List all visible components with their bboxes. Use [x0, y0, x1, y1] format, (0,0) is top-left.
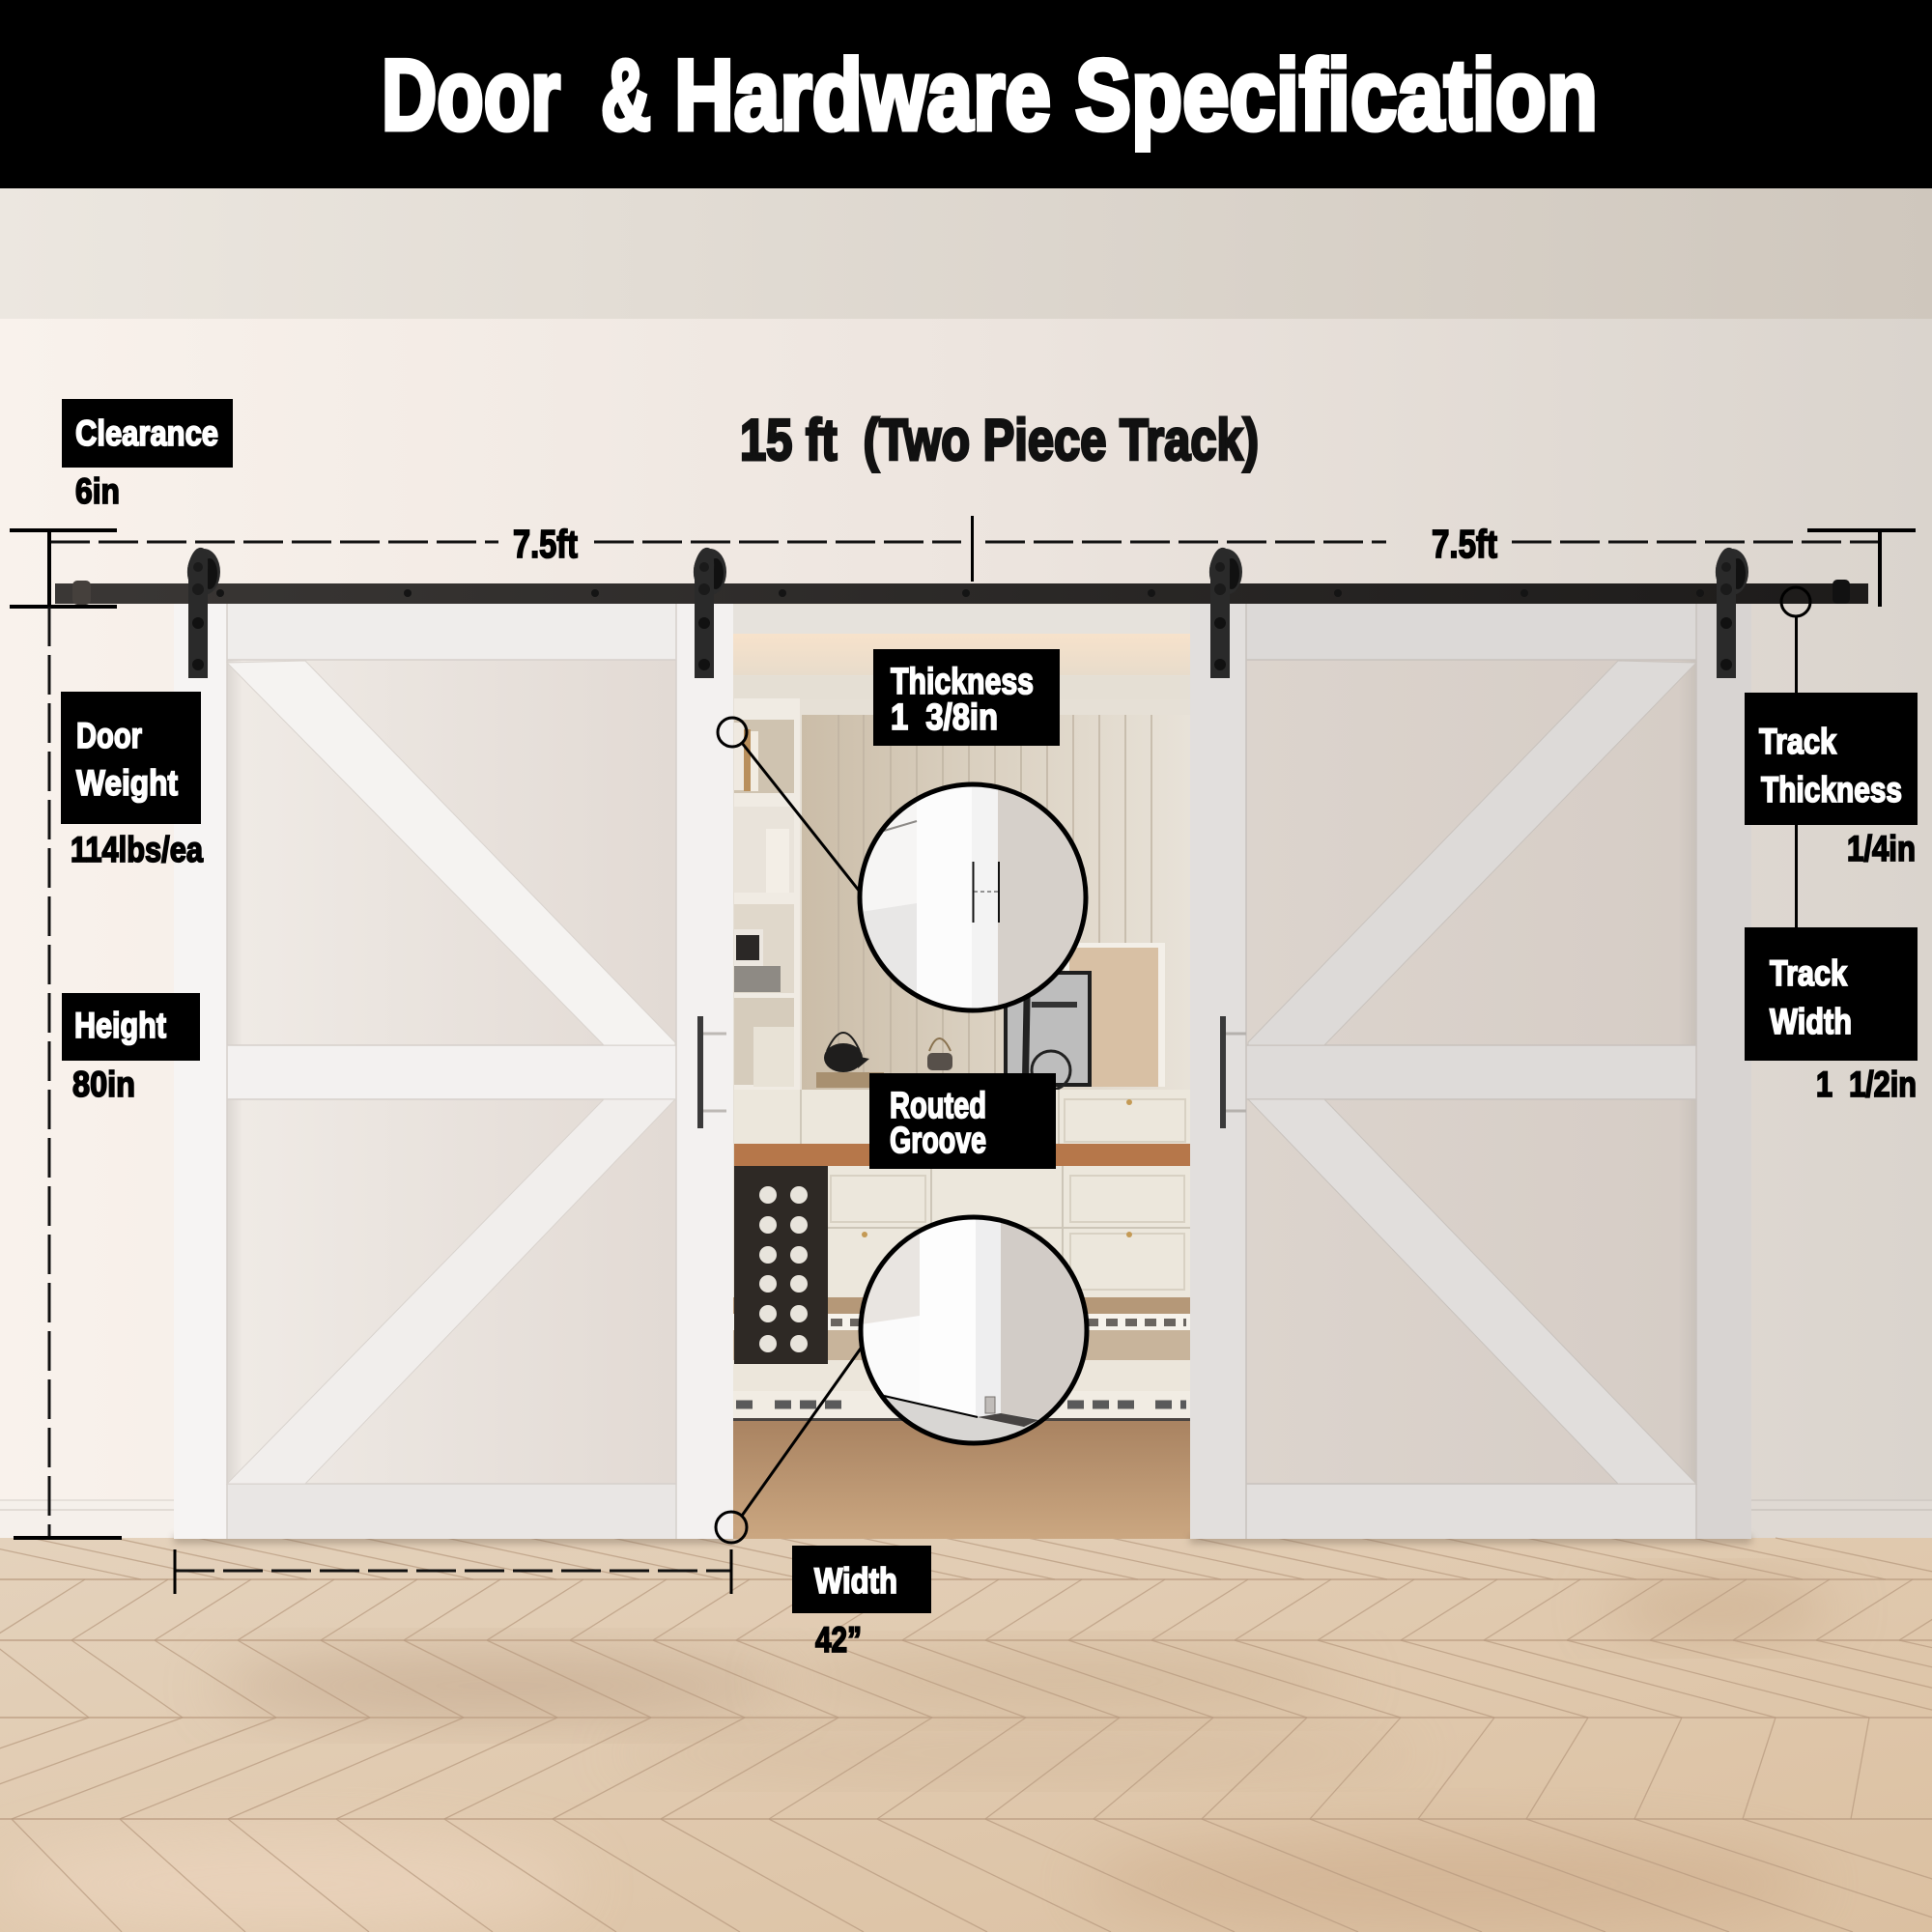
leader: track ring to track labels	[1781, 587, 1810, 930]
upper panel	[227, 660, 676, 1045]
callout: track width	[1745, 927, 1918, 1104]
callout: clearance: 6in	[75, 471, 120, 511]
callout: door weight: 114lbs/ea	[71, 830, 203, 869]
centre tick	[971, 516, 974, 582]
callout: door weight: Door	[76, 716, 142, 755]
callout: thickness: Thickness	[891, 662, 1034, 702]
track rail	[55, 583, 1868, 604]
black kettle	[816, 1033, 884, 1088]
title	[382, 40, 1598, 152]
left barn door	[174, 604, 733, 1539]
soffit	[733, 605, 1190, 634]
title: Specification	[1075, 40, 1598, 152]
upper panel	[1246, 660, 1696, 1045]
hanger 4	[1716, 548, 1748, 678]
callout: width: 42”	[815, 1620, 862, 1660]
patterned rug	[733, 1391, 1190, 1421]
title: Hardware	[674, 40, 1051, 152]
lower diagonal brace	[227, 1099, 675, 1484]
callout: width	[792, 1546, 931, 1660]
door handle	[1220, 1016, 1246, 1128]
callout: height: 80in	[72, 1065, 135, 1104]
crown moulding	[733, 676, 1190, 699]
wooden counter	[734, 1144, 1190, 1166]
baseboard left	[0, 1499, 174, 1538]
callout: door weight	[61, 692, 203, 869]
upper cabinets	[734, 1090, 1190, 1145]
callout: routed groove: Routed	[890, 1086, 986, 1126]
right end stop	[1833, 580, 1850, 604]
label: right section length: 7.5ft	[1432, 522, 1497, 566]
door frame	[1190, 604, 1751, 1539]
callout: thickness	[873, 649, 1060, 746]
callout: door weight: Weight	[76, 763, 178, 803]
lower cabinets	[828, 1166, 1190, 1297]
stiles and rails	[1190, 604, 1751, 1539]
right barn door	[1190, 604, 1751, 1539]
door handle	[697, 1016, 726, 1128]
clearance bracket right	[1807, 530, 1916, 607]
perforated black desk panel	[734, 1166, 828, 1364]
stiles and rails	[174, 604, 733, 1539]
callout: clearance: Clearance	[75, 413, 218, 453]
framed artwork	[1004, 943, 1165, 1090]
bookshelf	[734, 698, 800, 1090]
circle outline	[860, 784, 1086, 1010]
lower panel	[1246, 1099, 1696, 1484]
callout: track thickness: Thickness	[1761, 770, 1902, 810]
wall	[0, 319, 1932, 1538]
leader line	[742, 1346, 863, 1516]
clearance bracket left	[10, 530, 117, 607]
door height dimension line	[14, 607, 122, 1540]
title: &	[601, 40, 651, 152]
source ring	[718, 718, 747, 747]
upper diagonal brace	[1248, 661, 1696, 1045]
circle outline	[861, 1217, 1087, 1443]
magnified detail	[864, 1219, 1084, 1441]
door frame	[174, 604, 733, 1539]
callout: thickness: 1 3/8in	[891, 697, 998, 738]
callout: track thickness: Track	[1759, 722, 1836, 761]
lower panel	[227, 1099, 676, 1484]
horizontal track dimension lines	[50, 516, 1880, 582]
interior room seen through the opening	[733, 604, 1190, 1539]
callout: track thickness	[1745, 693, 1918, 868]
ceiling band	[0, 188, 1932, 319]
header bar	[0, 0, 1932, 188]
label: left section length: 7.5ft	[513, 522, 578, 566]
warm ceiling light	[733, 634, 1190, 675]
wood floor	[733, 1421, 1190, 1539]
callout: width: Width	[814, 1561, 897, 1601]
upper diagonal brace	[227, 661, 675, 1045]
floor beyond the door	[733, 1297, 1190, 1391]
parquet floor	[0, 1538, 1932, 1932]
callout: track width: Width	[1770, 1002, 1852, 1041]
track bolts	[216, 589, 1704, 597]
sliding track and hangers	[55, 548, 1868, 678]
panelled wall	[802, 715, 1190, 1090]
title: Door	[382, 40, 560, 152]
callout: clearance	[62, 399, 233, 511]
callout: track width: Track	[1770, 953, 1847, 993]
callout: routed groove	[869, 1073, 1056, 1169]
hanger 2	[694, 548, 726, 678]
callout: height: Height	[74, 1006, 166, 1045]
callout: track thickness: 1/4in	[1847, 829, 1916, 868]
hanger 3	[1209, 548, 1242, 678]
callout: routed groove: Groove	[890, 1121, 986, 1161]
callout: height	[62, 993, 200, 1104]
magnified detail	[862, 786, 1084, 1009]
thickness ticks	[974, 862, 999, 923]
floor shadow under doors	[174, 1536, 1751, 1543]
back wall	[733, 604, 1190, 1420]
source ring	[716, 1512, 747, 1543]
small kettle	[927, 1038, 952, 1070]
baseboard right	[1751, 1499, 1932, 1538]
leader line	[742, 743, 860, 892]
magnifier: door thickness	[718, 718, 1096, 1019]
magnifier: routed groove	[716, 1212, 1097, 1543]
hanger 1	[187, 548, 220, 678]
total track length heading: 15 ft (Two Piece Track)	[740, 408, 1259, 472]
door width dimension line	[175, 1549, 731, 1594]
lower diagonal brace	[1248, 1099, 1696, 1484]
left end stop	[72, 581, 91, 605]
